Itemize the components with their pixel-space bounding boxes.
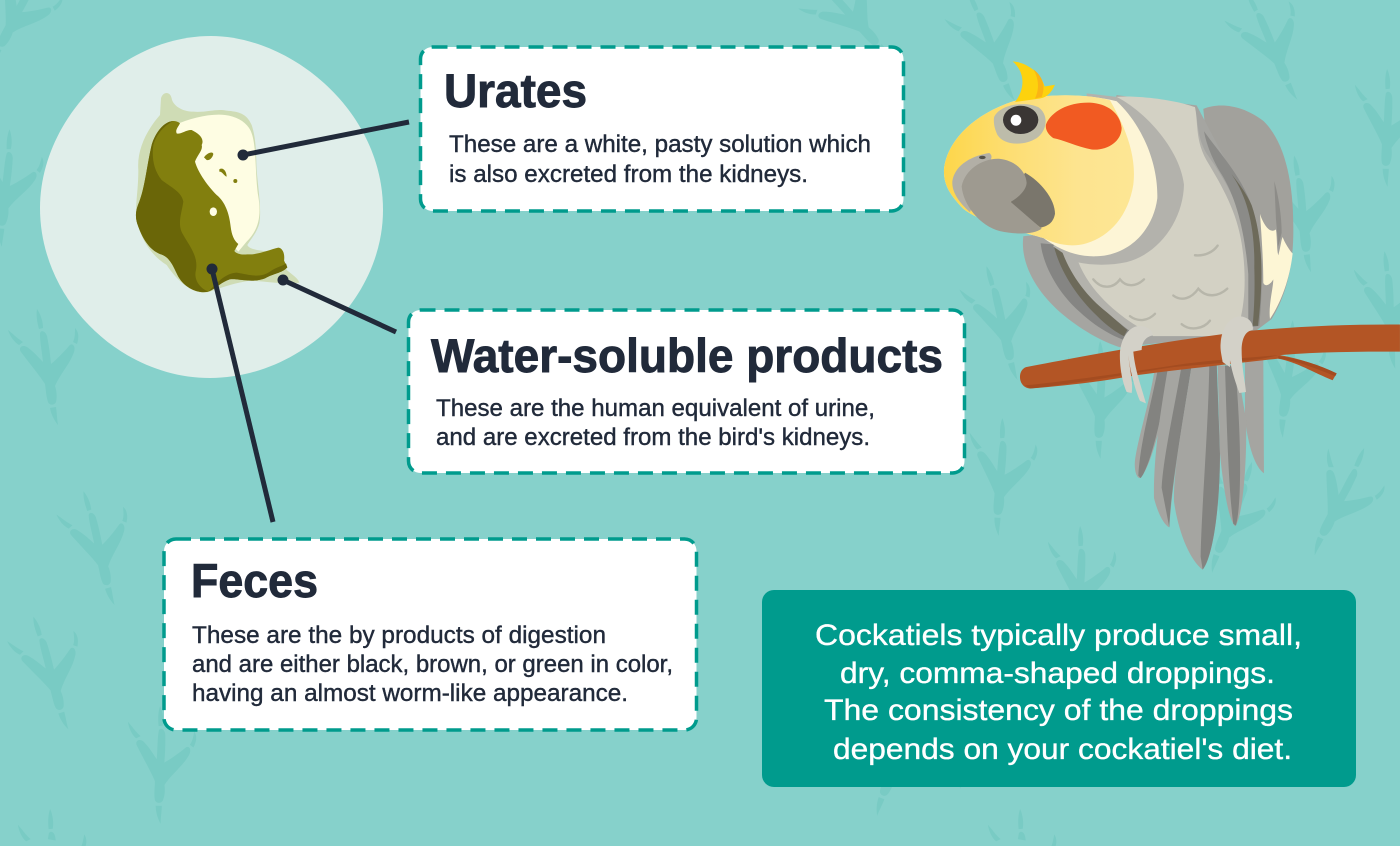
lower beak — [1010, 173, 1055, 228]
panel: water-soluble products — [408, 310, 964, 473]
connector: feces — [206, 264, 273, 522]
text: urates description: is also excreted from the kidneys. — [449, 161, 808, 188]
text: feces description — [192, 622, 673, 707]
cheek patch — [1046, 103, 1122, 150]
urates — [175, 115, 260, 252]
callout: consistency of droppings: Cockatiels typically produce small, — [815, 619, 1302, 652]
chest — [1078, 96, 1245, 336]
dark feces shading — [136, 121, 208, 292]
urate speck — [210, 207, 217, 216]
callout: consistency of droppings: dry, comma-shaped droppings. — [840, 657, 1275, 690]
wing cream patch — [1260, 214, 1293, 319]
head — [944, 95, 1157, 256]
branch — [1020, 324, 1400, 389]
feces speck one — [204, 152, 213, 160]
body dark back layer — [1041, 243, 1133, 340]
eye patch — [994, 104, 1046, 144]
yellow face — [944, 95, 1134, 245]
water-soluble halo — [136, 93, 299, 293]
back wing — [1203, 105, 1293, 333]
pale circle behind the dropping — [40, 36, 383, 378]
text: water-soluble description: and are excreted from the bird's kidneys. — [436, 424, 870, 451]
callout: consistency of droppings — [762, 590, 1356, 787]
chest inner band — [1062, 247, 1220, 336]
text: urates description: These are a white, pasty solution which — [449, 131, 871, 158]
eye — [1003, 106, 1038, 134]
wing dark feather tip — [1274, 181, 1282, 247]
beak outer — [952, 153, 992, 212]
text: water-soluble description: These are the human equivalent of urine, — [436, 395, 875, 422]
text: feces description: having an almost worm-like appearance. — [192, 680, 628, 707]
connector: urates — [238, 122, 409, 160]
right foot — [1220, 316, 1253, 393]
text: urates description — [449, 131, 871, 188]
illustration: dropping — [136, 93, 299, 293]
dark feces shading lower right — [208, 263, 287, 292]
callout: consistency of droppings: depends on your cockatiel's diet. — [833, 733, 1292, 766]
heading: feces: Feces — [191, 554, 318, 607]
olive wing stripe — [1232, 174, 1261, 326]
illustration: cockatiel on a branch — [944, 61, 1400, 570]
crest — [1013, 61, 1055, 102]
nostril — [979, 156, 986, 159]
body olive stripe — [1054, 247, 1127, 336]
left foot — [1120, 326, 1153, 403]
feces speck three — [233, 179, 237, 183]
grey collar — [1053, 93, 1184, 265]
right body grey band — [1153, 107, 1255, 336]
feces — [136, 121, 287, 292]
dark wing stripe — [1204, 131, 1262, 328]
tail feathers — [1135, 359, 1264, 570]
body back outer layer — [1023, 95, 1253, 347]
feces speck two — [219, 169, 227, 177]
text: feces description: and are either black, brown, or green in color, — [192, 651, 673, 678]
heading: water-soluble products: Water-soluble products — [431, 329, 943, 382]
text: water-soluble description — [436, 395, 875, 451]
connector: water-soluble products — [278, 274, 396, 332]
text: feces description: These are the by products of digestion — [192, 622, 606, 649]
eye highlight — [1011, 115, 1021, 126]
upper beak — [962, 159, 1042, 233]
heading: urates: Urates — [444, 64, 587, 117]
panel: feces — [164, 539, 696, 730]
panel: urates — [420, 47, 904, 211]
chest feather marks — [1093, 246, 1227, 328]
callout: consistency of droppings: The consistency of the droppings — [824, 694, 1293, 727]
